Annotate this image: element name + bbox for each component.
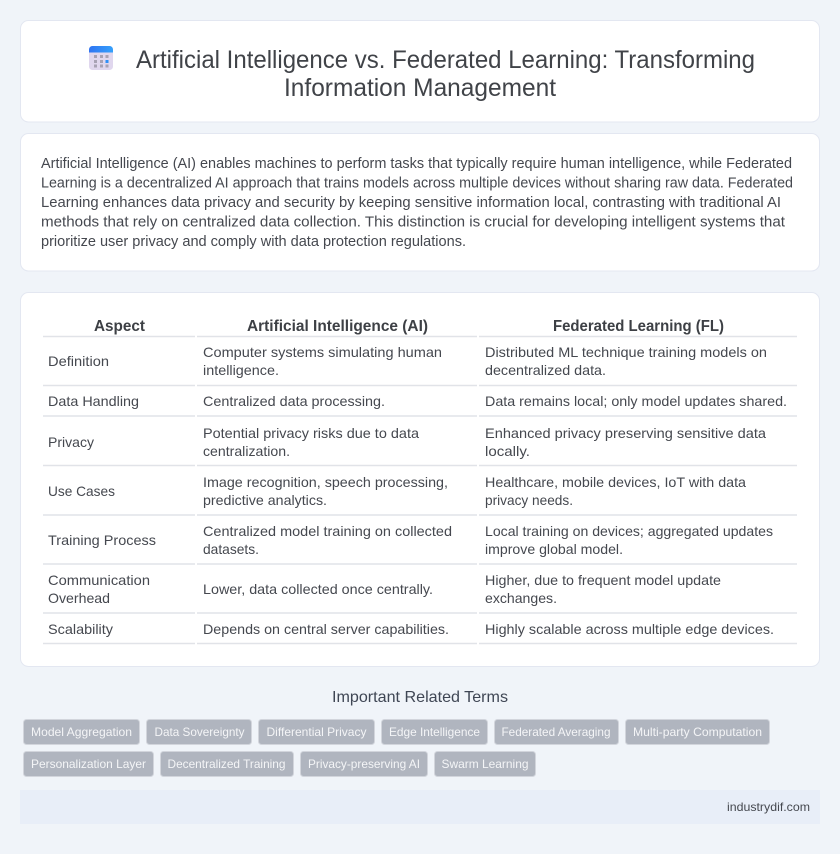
row: training process: datasets. — [203, 541, 259, 557]
row: training process: improve global model. — [485, 541, 623, 557]
row: use cases: Use Cases — [48, 483, 115, 499]
related terms chips: Edge Intelligence — [389, 725, 480, 739]
footer — [20, 790, 820, 824]
related terms chips: Personalization Layer — [31, 757, 146, 771]
panel: header — [20, 20, 820, 122]
row: use cases: predictive analytics. — [203, 492, 327, 508]
row: data handling: Data remains local; only model updates shared. — [485, 393, 787, 409]
row: privacy: locally. — [485, 443, 530, 459]
row: communication overhead — [43, 572, 797, 613]
text block: introduction paragraph: Learning is a decentralized AI approach that trains models across multiple devices without sharing raw data. Federated — [41, 176, 793, 192]
related terms chips: Data Sovereignty — [154, 725, 244, 739]
panel: introduction — [20, 134, 820, 271]
footer: industrydif.com — [727, 800, 810, 814]
related terms chips: Federated Averaging — [502, 725, 610, 739]
icon: calendar — [89, 46, 113, 70]
row: training process: Local training on devices; aggregated updates — [485, 523, 773, 539]
row: data handling: Data Handling — [48, 393, 139, 409]
row: use cases — [43, 474, 797, 515]
row: scalability: Scalability — [48, 621, 113, 637]
related terms chips: Privacy-preserving AI — [308, 757, 420, 771]
text block: introduction paragraph: prioritize user privacy and comply with data protection regulations. — [41, 234, 466, 250]
row: communication overhead: Overhead — [48, 590, 110, 606]
related terms chips: Differential Privacy — [266, 725, 366, 739]
related terms chips — [24, 720, 770, 776]
row: definition: intelligence. — [203, 362, 279, 378]
row: use cases: privacy needs. — [485, 492, 573, 508]
row: training process: Centralized model training on collected — [203, 523, 452, 539]
heading: related terms: Important Related Terms — [332, 689, 508, 706]
row: training process: Training Process — [48, 532, 156, 548]
row: privacy: Privacy — [48, 434, 94, 450]
row: definition: Definition — [48, 353, 109, 369]
table header: Federated Learning (FL) — [553, 318, 724, 335]
row: definition: Distributed ML technique training models on — [485, 344, 767, 360]
related terms chips: Multi-party Computation — [633, 725, 762, 739]
row: definition: decentralized data. — [485, 362, 606, 378]
row: data handling: Centralized data processing. — [203, 393, 385, 409]
row: communication overhead: Higher, due to frequent model update — [485, 572, 721, 588]
title — [136, 46, 755, 102]
row: scalability — [43, 621, 797, 644]
title: Information Management — [284, 74, 556, 102]
row: privacy: Enhanced privacy preserving sensitive data — [485, 425, 766, 441]
row: privacy: centralization. — [203, 443, 290, 459]
table header — [43, 318, 797, 336]
text block: introduction paragraph: Learning enhances data privacy and security by keeping sensitive information local, contrasting with traditional AI — [41, 195, 781, 211]
related terms chips: Decentralized Training — [168, 757, 286, 771]
row: data handling — [43, 393, 797, 416]
text block: introduction paragraph — [41, 156, 793, 250]
related terms chips: Swarm Learning — [442, 757, 528, 771]
row: scalability: Highly scalable across multiple edge devices. — [485, 621, 774, 637]
table header: Artificial Intelligence (AI) — [247, 318, 428, 335]
row: use cases: Healthcare, mobile devices, IoT with data — [485, 474, 746, 490]
text block: introduction paragraph: methods that rely on centralized data collection. This distinction is crucial for developing intelligent systems that — [41, 214, 785, 230]
row: definition: Computer systems simulating human — [203, 344, 442, 360]
row: training process — [43, 523, 797, 564]
row: privacy — [43, 425, 797, 466]
row: communication overhead: Lower, data collected once centrally. — [203, 581, 433, 597]
table header: Aspect — [94, 318, 146, 335]
panel: comparison table — [20, 292, 820, 666]
row: scalability: Depends on central server capabilities. — [203, 621, 449, 637]
row: communication overhead: exchanges. — [485, 590, 557, 606]
text block: introduction paragraph: Artificial Intelligence (AI) enables machines to perform tasks that typically require human intelligence, while Federated — [41, 156, 792, 172]
row: privacy: Potential privacy risks due to data — [203, 425, 419, 441]
row: definition — [43, 344, 797, 386]
title: Artificial Intelligence vs. Federated Learning: Transforming — [136, 46, 755, 74]
related terms chips: Model Aggregation — [31, 725, 132, 739]
row: communication overhead: Communication — [48, 572, 150, 588]
row: use cases: Image recognition, speech processing, — [203, 474, 448, 490]
